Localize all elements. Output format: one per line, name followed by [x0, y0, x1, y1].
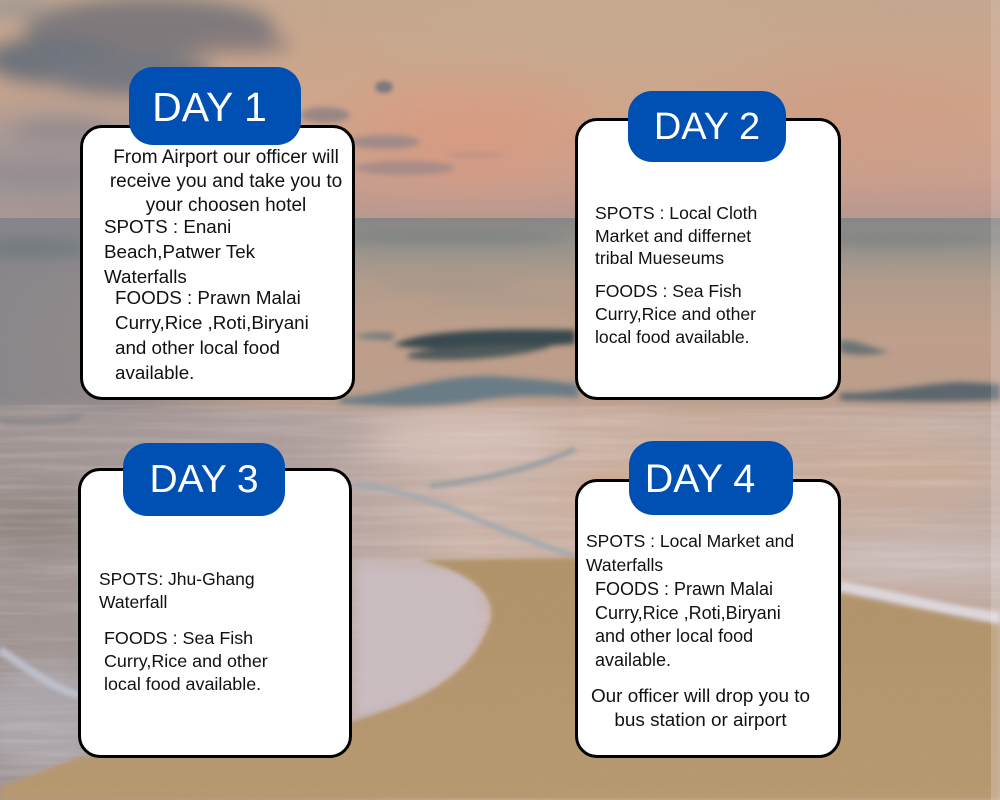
text: day 4 foods: Curry,Rice ,Roti,Biryani: [595, 603, 781, 623]
text: departure: bus station or airport: [614, 710, 787, 730]
text: arrival: [110, 147, 342, 216]
heading: day 4: DAY 4: [645, 457, 755, 501]
text: day 3 spots: Waterfall: [99, 592, 167, 612]
heading: day 2: [628, 91, 786, 162]
heading: day 4: [629, 441, 793, 515]
text: day 1 spots: Beach,Patwer Tek: [104, 241, 255, 262]
heading: day 2: DAY 2: [654, 106, 760, 148]
text: day 1 foods: Curry,Rice ,Roti,Biryani: [115, 312, 309, 333]
heading: day 1: [129, 67, 301, 145]
text: day 1 spots: [104, 216, 255, 287]
heading: day 1: DAY 1: [152, 84, 267, 130]
text: arrival: your choosen hotel: [146, 195, 306, 216]
text: departure: Our officer will drop you to: [591, 686, 810, 707]
text: day 3 spots: SPOTS: Jhu-Ghang: [99, 569, 255, 589]
text: day 1 foods: [115, 287, 309, 383]
text: day 4 foods: [595, 579, 781, 670]
text: day 4 spots: [586, 531, 794, 575]
text: day 2 foods: FOODS : Sea Fish: [595, 281, 742, 301]
card: day 4 background: [575, 479, 841, 758]
text: day 2 spots: [595, 203, 757, 268]
text: day 3 foods: [104, 628, 268, 694]
text: day 2 foods: Curry,Rice and other: [595, 304, 756, 324]
text: day 1 spots: Waterfalls: [104, 266, 187, 287]
text: day 1 foods: FOODS : Prawn Malai: [115, 287, 301, 308]
text: day 4 foods: available.: [595, 650, 671, 670]
foam: [0, 408, 1000, 800]
panel: day 1: [80, 67, 355, 448]
text: day 1 foods: and other local food: [115, 337, 280, 358]
text: day 2 spots: tribal Mueseums: [595, 248, 724, 268]
text: day 3 foods: local food available.: [104, 674, 261, 694]
card: day 1 background: [80, 125, 355, 400]
swash: [352, 560, 486, 722]
waves: [0, 330, 1000, 425]
text: arrival: From Airport our officer will: [113, 147, 339, 168]
sand: [0, 558, 1000, 800]
text: day 2 foods: local food available.: [595, 327, 750, 347]
sky: [0, 0, 1000, 219]
text: day 4 spots: SPOTS : Local Market and: [586, 531, 794, 551]
panel: day 2: [575, 91, 841, 400]
text: day 2 spots: Market and differnet: [595, 226, 751, 246]
text: day 1 spots: SPOTS : Enani: [104, 216, 231, 237]
text: day 3 foods: Curry,Rice and other: [104, 651, 268, 671]
text: day 4 foods: and other local food: [595, 626, 753, 646]
heading: day 3: [123, 443, 285, 516]
text: day 2 spots: SPOTS : Local Cloth: [595, 203, 757, 223]
text: day 3 spots: [99, 569, 255, 612]
text: departure: [591, 686, 810, 730]
text: day 4 foods: FOODS : Prawn Malai: [595, 579, 773, 599]
card: day 3 background: [78, 468, 352, 758]
sea: [0, 218, 1000, 438]
heading: day 3: DAY 3: [149, 458, 259, 501]
card: day 2 background: [575, 118, 841, 400]
text: day 1 foods: available.: [115, 362, 194, 383]
text: day 2 foods: [595, 281, 756, 347]
text: day 3 foods: FOODS : Sea Fish: [104, 628, 253, 648]
panel: day 4: [575, 441, 841, 758]
text: day 4 spots: Waterfalls: [586, 555, 663, 575]
text: arrival: receive you and take you to: [110, 171, 342, 192]
panel: day 3: [78, 443, 352, 758]
